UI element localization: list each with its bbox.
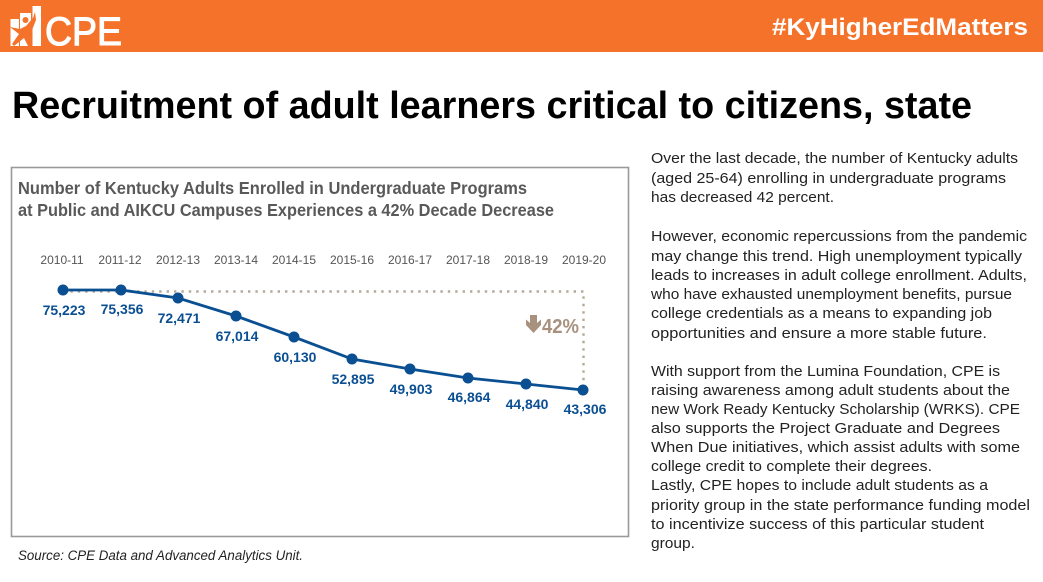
year axis labels: 2013-14: [214, 253, 258, 267]
chart heading: at Public and AIKCU Campuses Experiences a 42% Decade Decrease: [18, 200, 554, 220]
year axis labels: 2018-19: [504, 253, 548, 267]
chart heading: [18, 178, 554, 220]
year axis labels: [40, 253, 606, 267]
paragraph 3: Lastly, CPE hopes to include adult students as a: [651, 477, 989, 494]
paragraph 1: [651, 150, 1018, 206]
paragraph 3: With support from the Lumina Foundation, CPE is: [651, 363, 1000, 380]
paragraph 3: to incentivize success of this particular student: [651, 516, 985, 533]
paragraph 2: However, economic repercussions from the pandemic: [651, 228, 1028, 245]
year axis labels: 2014-15: [272, 253, 316, 267]
panel: line chart: [12, 168, 628, 536]
body text: [650, 150, 1030, 552]
year axis labels: 2019-20: [562, 253, 606, 267]
paragraph 3: When Due initiatives, which assist adults with some: [651, 439, 1020, 456]
paragraph 2: may change this trend. High unemployment typically: [651, 248, 1023, 265]
callout: 42 percent decrease: 42%: [542, 316, 579, 338]
year axis labels: 2011-12: [98, 253, 142, 267]
data value labels: 46,864: [448, 389, 491, 405]
year axis labels: 2016-17: [388, 253, 432, 267]
data value labels: 44,840: [506, 396, 549, 412]
data value labels: 52,895: [332, 371, 375, 387]
paragraph 3: new Work Ready Kentucky Scholarship (WRKS). CPE: [651, 401, 1020, 418]
paragraph 2: who have exhausted unemployment benefits, pursue: [650, 286, 1012, 303]
year axis labels: 2015-16: [330, 253, 374, 267]
callout: 42 percent decrease: [526, 315, 579, 338]
year axis labels: 2012-13: [156, 253, 200, 267]
data value labels: 43,306: [564, 401, 607, 417]
paragraph 2: leads to increases in adult college enrollment. Adults,: [651, 267, 1027, 284]
data value labels: 72,471: [158, 310, 201, 326]
year axis labels: 2010-11: [40, 253, 84, 267]
paragraph 3: college credit to complete their degrees.: [651, 458, 932, 475]
data value labels: [43, 301, 607, 417]
paragraph 1: has decreased 42 percent.: [651, 189, 834, 206]
paragraph 1: (aged 25-64) enrolling in undergraduate programs: [651, 170, 1006, 187]
source note: Source: CPE Data and Advanced Analytics Unit.: [18, 548, 303, 563]
paragraph 3: priority group in the state performance funding model: [651, 497, 1030, 514]
paragraph 3: [651, 363, 1030, 552]
data value labels: 67,014: [216, 328, 259, 344]
data value labels: 60,130: [274, 349, 317, 365]
year axis labels: 2017-18: [446, 253, 490, 267]
chart heading: Number of Kentucky Adults Enrolled in Undergraduate Programs: [18, 178, 527, 198]
title: Recruitment of adult learners critical to citizens, state: [12, 85, 972, 127]
paragraph 2: college credentials as a means to expanding job: [651, 305, 992, 322]
logo: CPE: CPE: [45, 10, 122, 54]
paragraph 2: [650, 228, 1028, 342]
data value labels: 75,356: [101, 301, 144, 317]
paragraph 3: raising awareness among adult students about the: [651, 382, 1010, 399]
dotted reference bracket: [63, 292, 584, 390]
paragraph 2: opportunities and ensure a more stable future.: [651, 325, 987, 342]
paragraph 1: Over the last decade, the number of Kentucky adults: [651, 150, 1018, 167]
logo: CPE: [10, 6, 122, 54]
header banner: [0, 0, 1043, 54]
data line: [58, 284, 588, 396]
hashtag: #KyHigherEdMatters: [772, 14, 1028, 41]
data value labels: 75,223: [43, 302, 86, 318]
paragraph 3: also supports the Project Graduate and Degrees: [651, 420, 1000, 437]
data value labels: 49,903: [390, 381, 433, 397]
paragraph 3: group.: [651, 535, 695, 552]
